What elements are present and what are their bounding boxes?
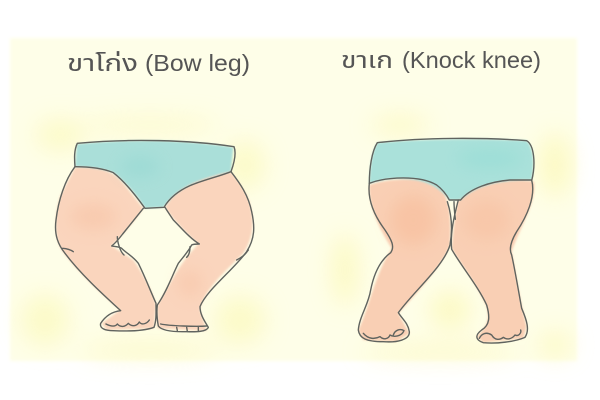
illustration: bow legs [56,140,254,332]
knock knees outline [358,138,534,343]
heading: knock knee: (Knock knee) [402,47,541,73]
heading: bow leg: ขาโก่ง [67,50,138,76]
bow legs briefs outline [75,140,235,172]
bow legs left leg outline [56,167,156,331]
knock knees left leg outline [358,183,451,342]
heading: knock knee [341,47,541,73]
bow legs tone [70,157,202,297]
bow legs right leg outline [157,172,254,332]
illustration: knock knees [358,138,534,343]
knock knees tone [390,148,523,245]
bow legs toes [106,320,149,326]
yellow watercolor wash: left panel [21,118,266,358]
knock knees toes [363,330,404,339]
heading: bow leg: (Bow leg) [145,50,250,76]
yellow watercolor wash: right panel [333,117,571,358]
bow legs colour wash [56,141,252,331]
knock knees briefs outline [369,138,534,183]
knock knees colour wash [358,139,534,343]
heading: bow leg [67,50,250,76]
heading: knock knee: ขาเก [341,47,393,73]
cream background panel [10,38,577,361]
knock knees right leg outline [451,180,533,343]
bow legs outline [56,140,254,332]
